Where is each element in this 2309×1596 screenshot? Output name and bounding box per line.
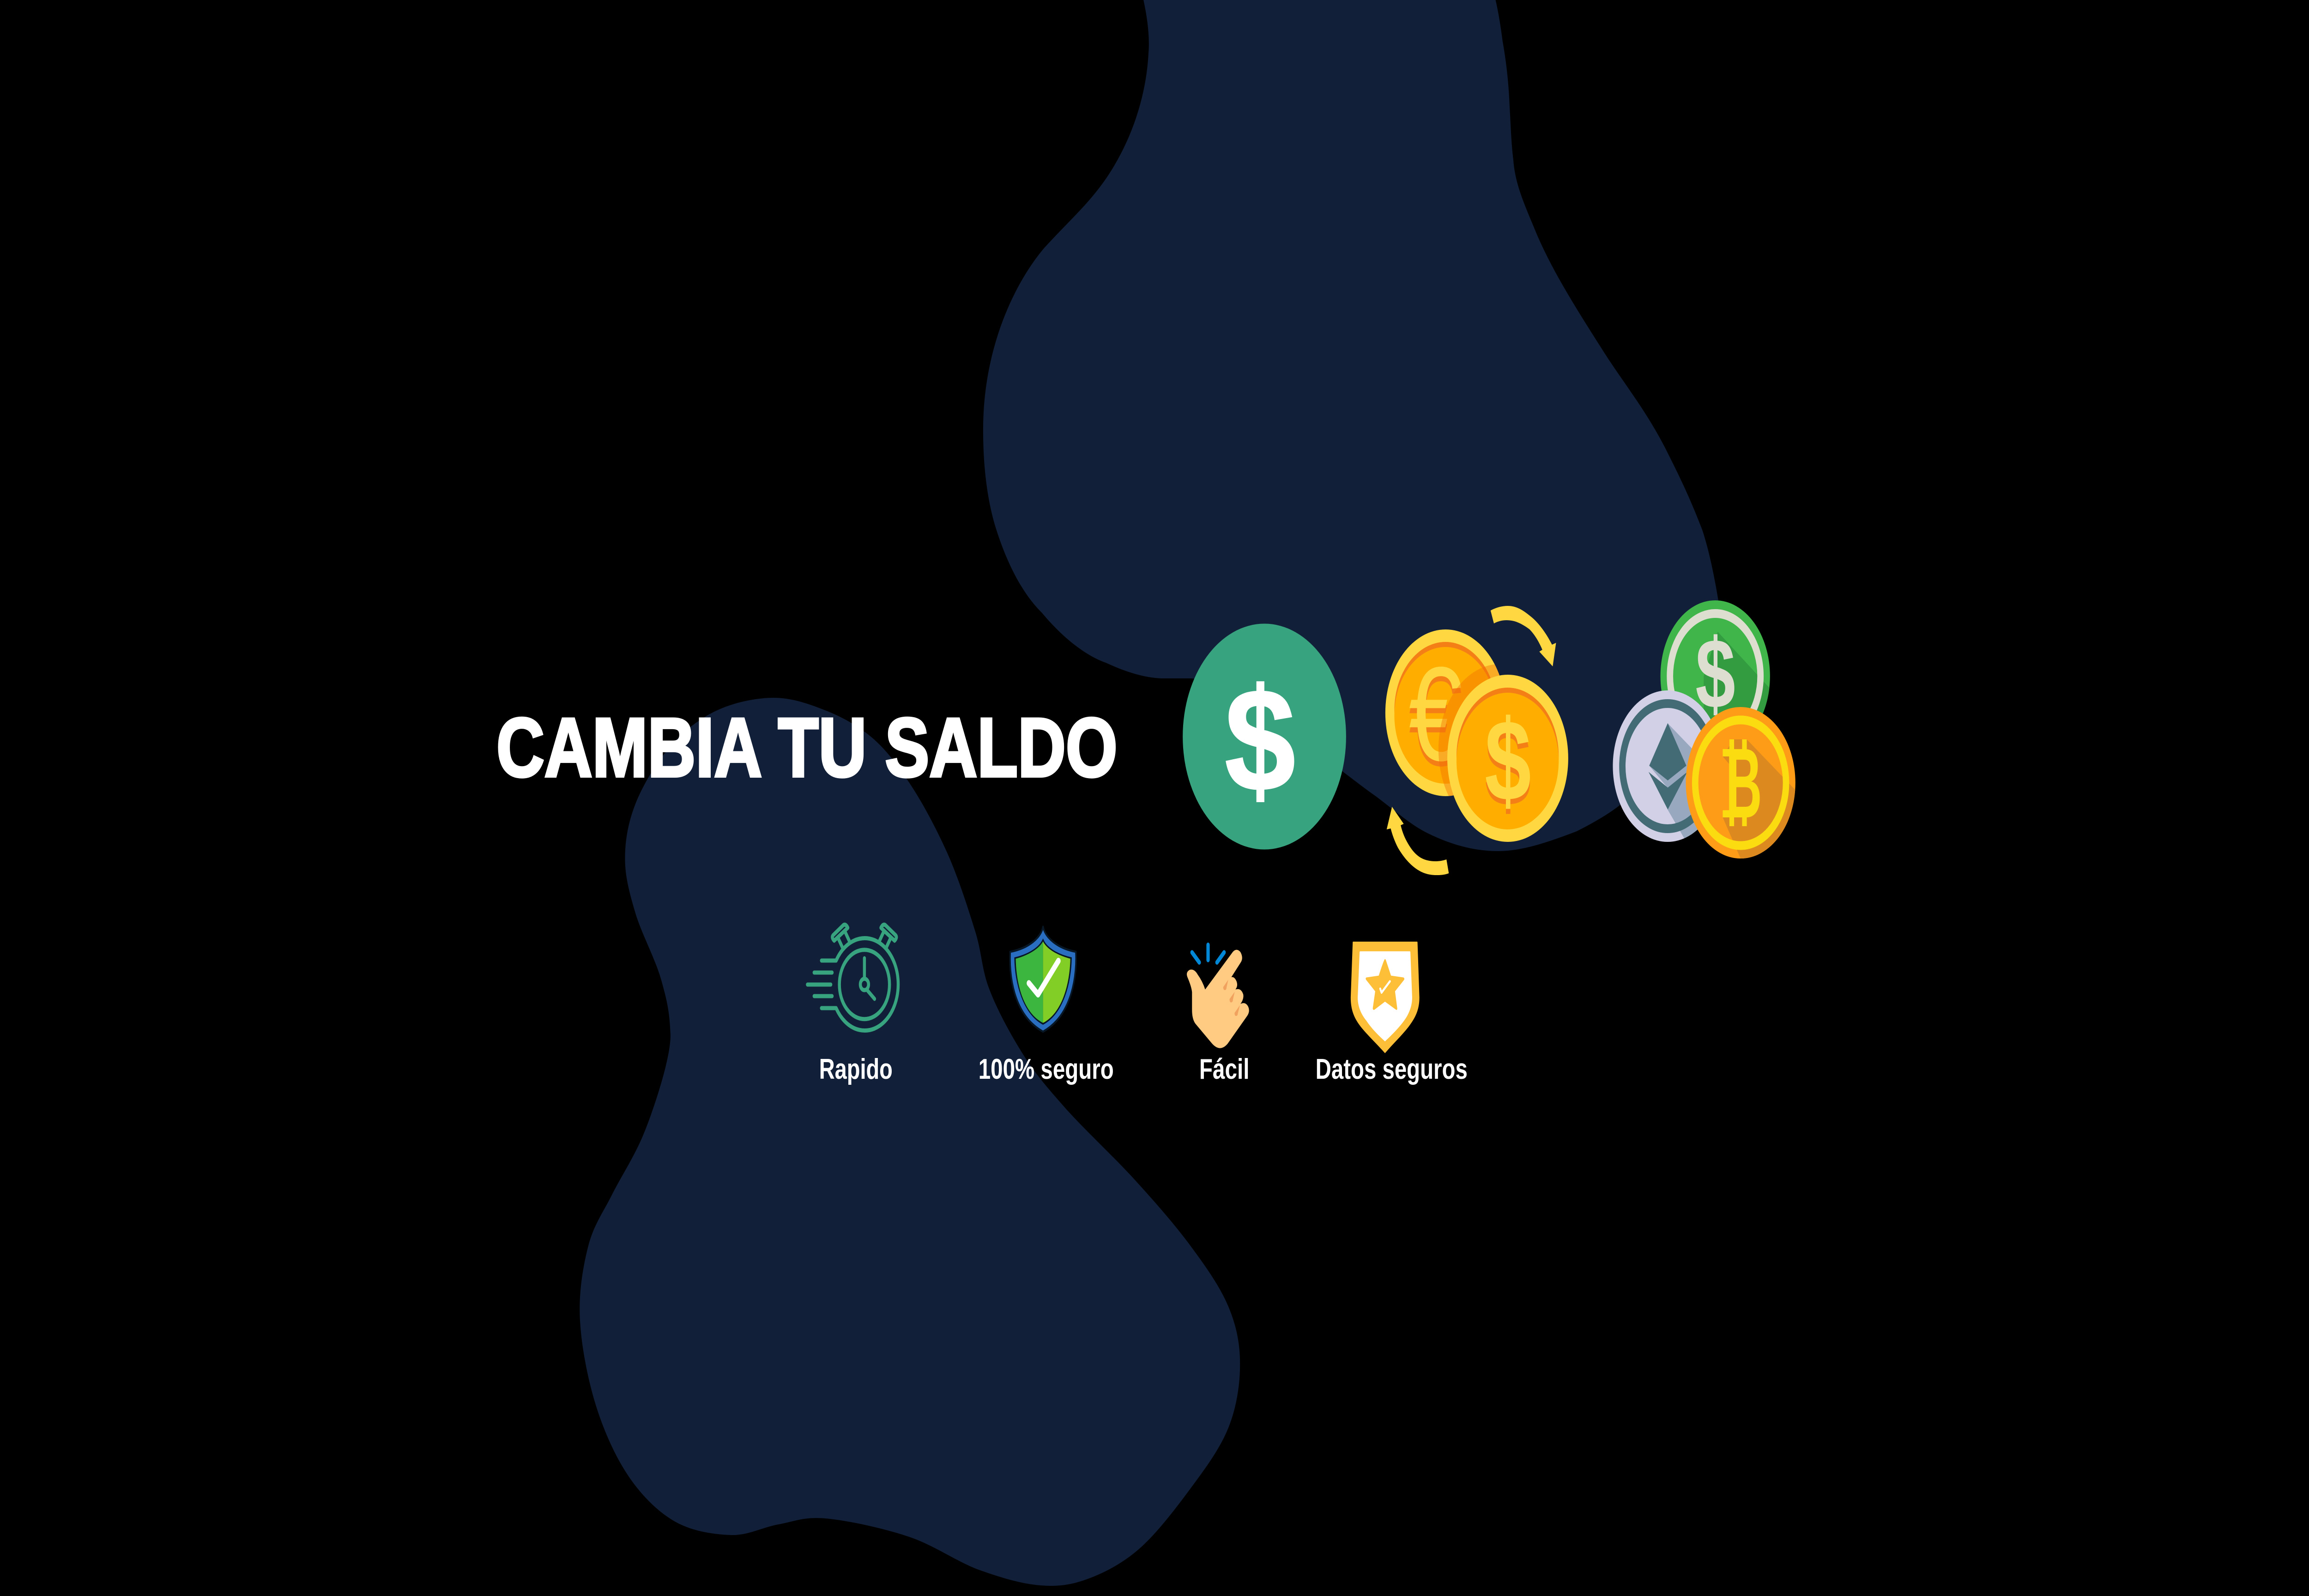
title: CAMBIA TU SALDO (496, 701, 1118, 794)
arrow: clockwise top (1491, 606, 1556, 666)
euro coin: € (1408, 639, 1463, 789)
label: Fácil: Fácil (1199, 1053, 1249, 1085)
blob: lower navy shape (580, 698, 1240, 1586)
euro coin (1385, 629, 1500, 796)
label: Rapido: Rapido (819, 1053, 893, 1085)
icon: crypto coins (1613, 600, 1795, 858)
blob: top navy shape (983, 0, 1721, 851)
icon: green dollar circle: $ (1225, 658, 1295, 822)
label: 100% seguro: 100% seguro (979, 1053, 1114, 1085)
bitcoin coin: B (1726, 728, 1762, 839)
arrow: clockwise bottom (1387, 807, 1449, 875)
green dollar coin: $ (1695, 618, 1735, 729)
bitcoin coin (1686, 707, 1804, 877)
dollar coin (1447, 675, 1568, 842)
green dollar coin (1661, 600, 1774, 757)
dollar coin: $ (1485, 696, 1531, 825)
icon: finger snap hand (1187, 945, 1249, 1048)
icon: stopwatch (807, 925, 898, 1030)
label: Datos seguros: Datos seguros (1316, 1053, 1468, 1085)
icon: currency exchange coins (1385, 606, 1568, 875)
euro coin: € (1408, 644, 1463, 794)
icon: badge with star (1351, 942, 1420, 1053)
ethereum coin (1613, 690, 1727, 877)
icon: green dollar circle (1183, 623, 1346, 850)
icon: shield with check (1010, 927, 1076, 1032)
dollar coin: $ (1485, 701, 1531, 830)
